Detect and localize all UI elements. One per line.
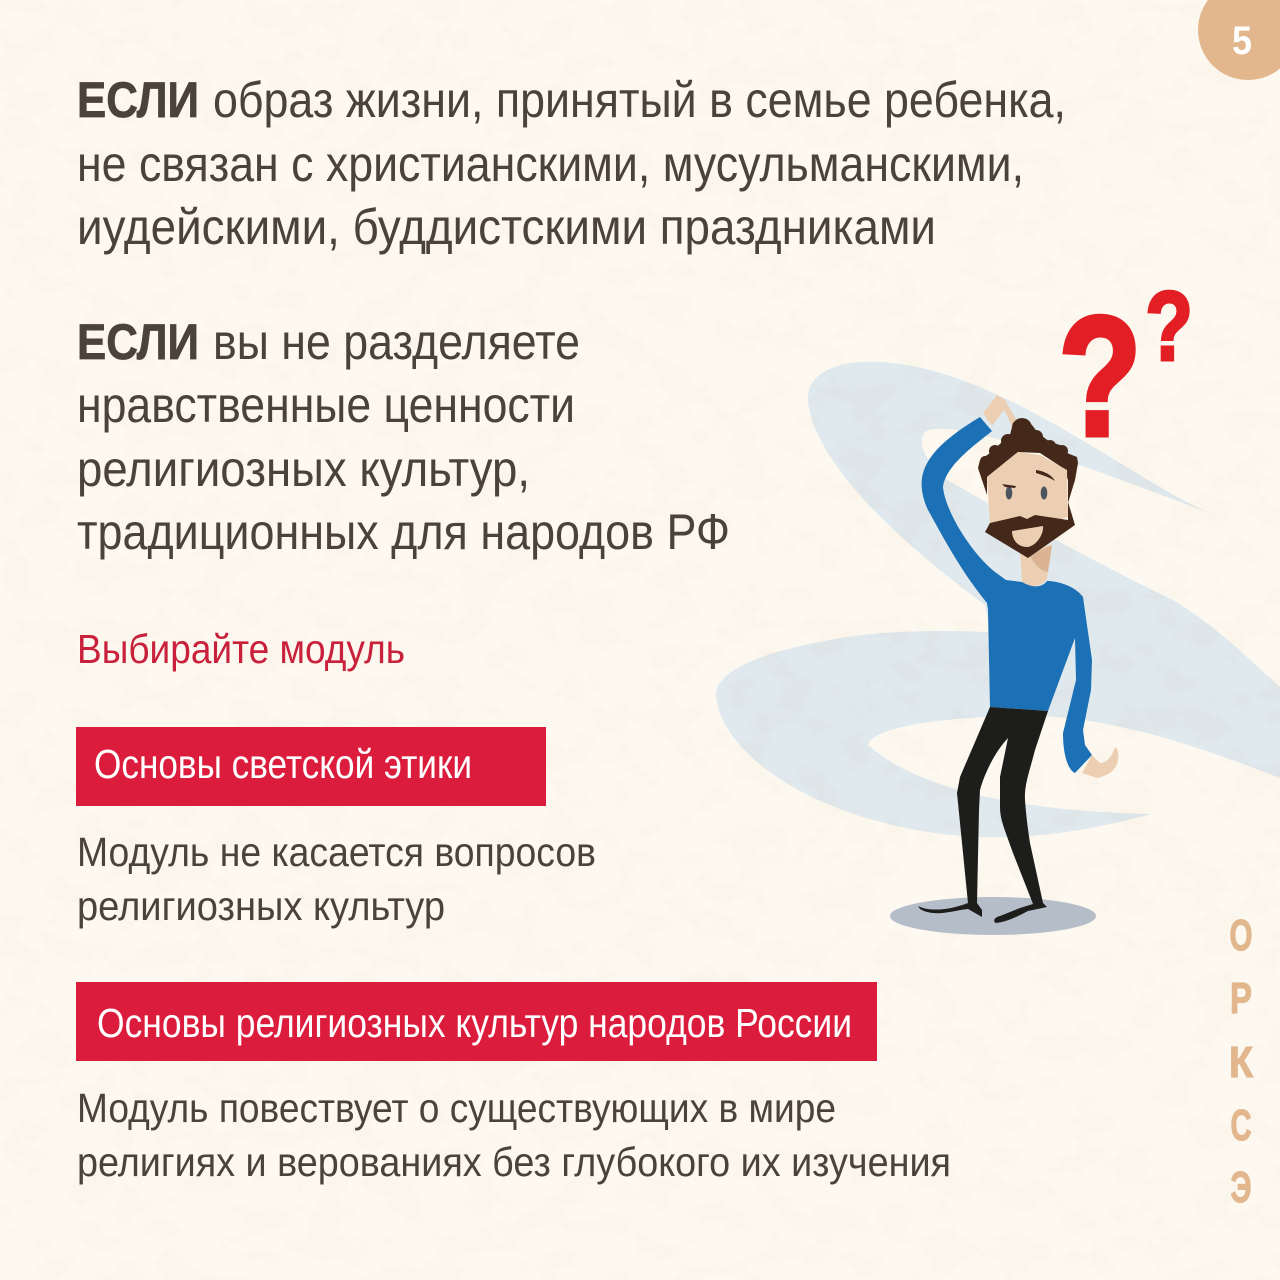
eyebrows (1002, 470, 1055, 488)
page number badge (1198, 0, 1280, 80)
lowered hand (1082, 747, 1118, 778)
raised hand (983, 395, 1019, 426)
ground shadow (890, 897, 1096, 935)
decorative blue swoosh (716, 362, 1280, 837)
page number badge: 5 (1232, 19, 1252, 63)
text block: second condition: религиозных культур, (77, 441, 530, 497)
vertical label ОРКСЭ: К (1229, 1038, 1253, 1087)
large question mark: ? (1058, 282, 1142, 471)
description: religious cultures: Модуль повествует о существующих в мире (77, 1085, 836, 1131)
small question mark: ? (1145, 272, 1193, 381)
description: secular ethics (77, 829, 596, 929)
description: religious cultures (77, 1085, 951, 1185)
eyes (1006, 486, 1047, 500)
module bar: secular ethics: Основы светской этики (94, 741, 472, 787)
face (987, 452, 1068, 530)
vertical label ОРКСЭ: С (1230, 1101, 1252, 1150)
mouth (1012, 526, 1043, 547)
blue sweater and arms (922, 417, 1092, 773)
hair (978, 418, 1078, 503)
module bar: secular ethics (76, 727, 546, 806)
module bar: religious cultures (76, 982, 877, 1061)
text block: first condition: ЕСЛИ (77, 72, 199, 128)
text block: second condition: нравственные ценности (77, 377, 575, 433)
vertical label ОРКСЭ: Э (1230, 1163, 1252, 1212)
black trousers and shoes (918, 707, 1048, 923)
illustration: puzzled man (890, 395, 1118, 935)
neck shadow (1030, 545, 1052, 572)
text block: second condition: ЕСЛИ (77, 314, 199, 370)
vertical label ОРКСЭ (1229, 911, 1253, 1212)
description: secular ethics: Модуль не касается вопросов (77, 829, 596, 875)
text block: first condition (77, 72, 1066, 255)
text block: second condition: вы не разделяете (213, 314, 580, 370)
text block: first condition: иудейскими, буддистскими праздниками (77, 199, 936, 255)
heading: choose module: Выбирайте модуль (77, 626, 405, 672)
module bar: religious cultures: Основы религиозных культур народов России (97, 1000, 852, 1046)
text block: second condition: традиционных для народов РФ (77, 504, 730, 560)
text block: second condition (77, 314, 730, 560)
text block: first condition: не связан с христианскими, мусульманскими, (77, 136, 1024, 192)
vertical label ОРКСЭ: Р (1230, 974, 1252, 1023)
neck (1020, 545, 1052, 586)
beard (985, 502, 1075, 558)
text block: first condition: образ жизни, принятый в семье ребенка, (213, 72, 1066, 128)
description: religious cultures: религиях и верованиях без глубокого их изучения (77, 1139, 951, 1185)
vertical label ОРКСЭ: О (1230, 911, 1252, 960)
description: secular ethics: религиозных культур (77, 883, 445, 929)
